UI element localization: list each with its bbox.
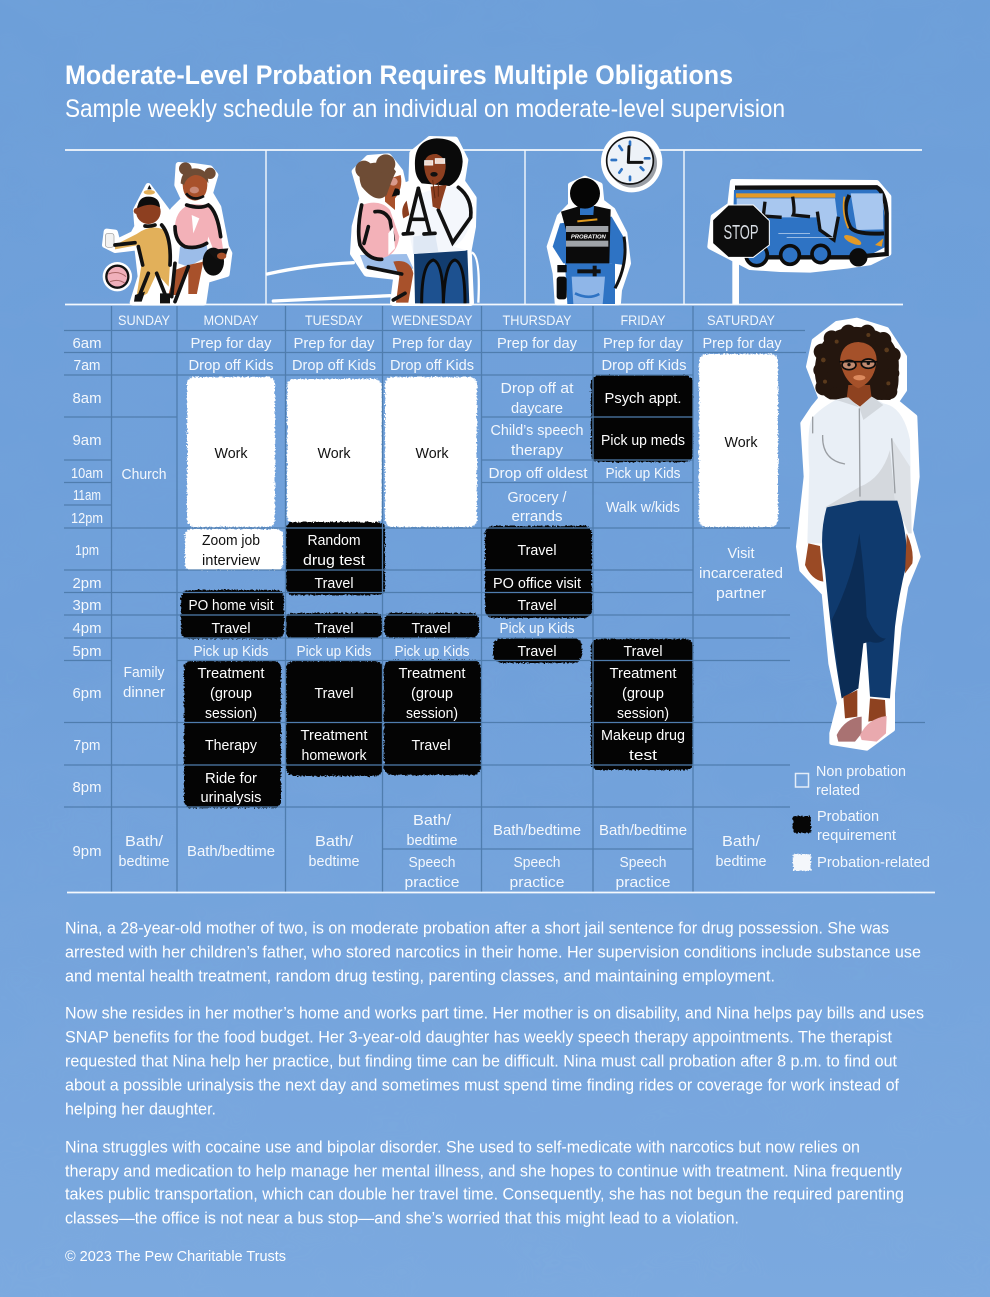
legend: non probation related bbox=[796, 764, 906, 799]
column: Tuesday: bedtime bbox=[308, 853, 360, 870]
column: Friday: Pick up Kids bbox=[606, 465, 680, 482]
column: Thursday: Grocery / bbox=[508, 489, 567, 506]
block: Saturday work bbox=[699, 354, 778, 527]
legend: non probation related: related bbox=[816, 783, 860, 799]
legend: non probation related: Non probation bbox=[816, 764, 906, 780]
illustration: bus and stop sign: STOP bbox=[723, 222, 758, 244]
day headers: SUNDAY bbox=[118, 312, 171, 328]
block: Friday evening obligations bbox=[591, 639, 693, 770]
text block: paragraph two: Now she resides in her mother’s home and works part time. Her mother is on disability, and Nina helps pay bills and uses bbox=[65, 1004, 924, 1022]
text block: paragraph two bbox=[65, 1004, 924, 1118]
day headers: SATURDAY bbox=[707, 312, 776, 328]
column: Saturday: partner bbox=[716, 585, 766, 602]
column: Monday: (group bbox=[210, 685, 252, 702]
block: Wednesday evening obligations bbox=[384, 660, 481, 775]
block: Thursday office visit and travel bbox=[485, 526, 592, 618]
column: Thursday: Bath/bedtime bbox=[493, 822, 581, 839]
column: Friday: session) bbox=[617, 705, 669, 722]
column: Wednesday: Drop off Kids bbox=[390, 357, 474, 374]
column: Wednesday: Treatment bbox=[398, 665, 466, 682]
block: Wednesday work bbox=[385, 377, 477, 527]
column: Wednesday: practice bbox=[404, 874, 460, 891]
time labels: 10am bbox=[71, 465, 103, 482]
column: Wednesday bbox=[390, 335, 474, 891]
column: Friday: Treatment bbox=[610, 665, 677, 682]
column: Sunday: dinner bbox=[123, 684, 165, 701]
column: Tuesday: Bath/ bbox=[315, 833, 354, 850]
column: Wednesday: session) bbox=[406, 705, 458, 722]
column: Tuesday: Pick up Kids bbox=[296, 643, 372, 660]
text block: paragraph two: requested that Nina help her practice, but finding time can be difficult. Nina must call probation after 8 p.m. to find out bbox=[65, 1052, 897, 1070]
day headers: FRIDAY bbox=[620, 312, 666, 328]
legend bbox=[793, 764, 930, 871]
column: Wednesday: Bath/ bbox=[413, 812, 452, 829]
column: Wednesday: bedtime bbox=[406, 832, 458, 849]
copyright: © 2023 The Pew Charitable Trusts bbox=[65, 1249, 286, 1265]
column: Thursday: therapy bbox=[511, 442, 564, 459]
column: Saturday bbox=[699, 335, 783, 870]
column: Saturday: Work bbox=[724, 434, 758, 451]
column: Friday: Bath/bedtime bbox=[599, 822, 687, 839]
column: Friday bbox=[599, 335, 687, 891]
column: Thursday: Drop off oldest bbox=[488, 465, 588, 482]
column: Tuesday: Treatment bbox=[300, 727, 368, 744]
column: Thursday: Travel bbox=[518, 597, 556, 614]
illustration: child with therapist bbox=[267, 138, 479, 303]
column: Monday: Bath/bedtime bbox=[187, 843, 275, 860]
legend: probation requirement: Probation bbox=[817, 809, 879, 825]
day headers: MONDAY bbox=[204, 312, 259, 328]
column: Monday: Drop off Kids bbox=[188, 357, 274, 374]
text block: paragraph three: Nina struggles with cocaine use and bipolar disorder. She used to self-medicate with narcotics but now relies on bbox=[65, 1138, 860, 1156]
time labels: 4pm bbox=[72, 620, 102, 637]
probation-related and requirement blocks bbox=[181, 354, 778, 808]
column: Wednesday: Speech bbox=[408, 854, 456, 871]
column: Wednesday: Prep for day bbox=[392, 335, 472, 352]
time labels: 9am bbox=[72, 432, 102, 449]
column: Friday: Speech bbox=[620, 854, 666, 871]
illustration: probation officer: PROBATION bbox=[571, 234, 607, 240]
illustration: Nina standing bbox=[798, 320, 918, 748]
day headers: THURSDAY bbox=[502, 312, 572, 328]
column: Thursday: daycare bbox=[511, 400, 563, 417]
column: Monday: Treatment bbox=[198, 665, 265, 682]
block: Thursday evening travel bbox=[493, 638, 582, 663]
column: Friday: Walk w/kids bbox=[606, 499, 680, 516]
illustration: children with ball bbox=[103, 162, 229, 303]
time labels: 12pm bbox=[71, 510, 103, 527]
block: Tuesday afternoon travel bbox=[286, 613, 382, 638]
time labels: 11am bbox=[73, 487, 101, 504]
text block: paragraph one: and mental health treatment, random drug testing, parenting classes, and maintaining employment. bbox=[65, 968, 775, 986]
text block: paragraph two: SNAP benefits for the food budget. Her 3-year-old daughter has weekly speech therapy appointments. The therapist bbox=[65, 1028, 892, 1046]
column: Wednesday: Pick up Kids bbox=[394, 643, 470, 660]
column: Friday: (group bbox=[622, 685, 664, 702]
time labels: 8pm bbox=[72, 779, 102, 796]
text block: paragraph three: therapy and medication to help manage her mental illness, and she hopes to continue with treatment. Nina frequently bbox=[65, 1162, 903, 1180]
column: Monday: PO home visit bbox=[188, 597, 274, 614]
column: Tuesday: Travel bbox=[314, 685, 354, 702]
block: Tuesday evening obligations bbox=[286, 661, 383, 776]
text block: paragraph three: takes public transportation, which can double her travel time. Consequently, she has not begun the required parenting bbox=[65, 1186, 904, 1204]
column: Monday: Travel bbox=[212, 620, 250, 637]
schedule table bbox=[64, 306, 925, 892]
text block: paragraph two: helping her daughter. bbox=[65, 1100, 216, 1118]
time labels: 9pm bbox=[72, 843, 102, 860]
time labels: 6am bbox=[72, 335, 102, 352]
text block: paragraph two: about a possible urinalysis the next day and sometimes must spend time finding rides or coverage for work instead of bbox=[65, 1076, 899, 1094]
legend: probation-related: Probation-related bbox=[817, 855, 930, 871]
day headers: TUESDAY bbox=[305, 312, 364, 328]
column: Monday: urinalysis bbox=[200, 789, 262, 806]
column: Thursday bbox=[488, 335, 588, 891]
illustration: probation officer bbox=[549, 178, 628, 304]
column: Sunday: Family bbox=[124, 664, 165, 681]
text block: paragraph one: arrested with her children’s father, who stored narcotics in their home. Her supervision conditions include substance use bbox=[65, 944, 921, 962]
column: Sunday: Bath/ bbox=[125, 833, 164, 850]
column: Monday: Work bbox=[214, 445, 248, 462]
column: Tuesday: Travel bbox=[314, 620, 354, 637]
column: Sunday: bedtime bbox=[118, 853, 170, 870]
column: Sunday bbox=[118, 466, 170, 870]
column: Tuesday: Drop off Kids bbox=[292, 357, 376, 374]
day headers: WEDNESDAY bbox=[392, 312, 473, 328]
column: Thursday: Pick up Kids bbox=[500, 620, 574, 637]
time labels bbox=[71, 335, 103, 860]
time labels: 7am bbox=[74, 357, 100, 374]
column: Monday: Pick up Kids bbox=[194, 643, 268, 660]
column: Thursday: practice bbox=[510, 874, 564, 891]
time labels: 8am bbox=[72, 390, 102, 407]
time labels: 3pm bbox=[72, 597, 102, 614]
column: Friday: Makeup drug bbox=[601, 727, 685, 744]
column: Thursday: Drop off at bbox=[500, 380, 574, 397]
block: Monday work bbox=[187, 377, 275, 527]
column: Friday: Psych appt. bbox=[604, 390, 682, 407]
column: Sunday: Church bbox=[122, 466, 166, 483]
text block: paragraph three: classes—the office is not near a bus stop—and she’s worried that this might lead to a violation. bbox=[65, 1210, 739, 1228]
column: Thursday: Travel bbox=[518, 643, 556, 660]
column: Saturday: Prep for day bbox=[702, 335, 782, 352]
column: Saturday: Visit bbox=[728, 545, 755, 562]
legend: probation requirement: requirement bbox=[817, 828, 896, 844]
column: Monday: Ride for bbox=[205, 770, 257, 787]
column: Thursday: Prep for day bbox=[497, 335, 577, 352]
column: Monday: Prep for day bbox=[190, 335, 272, 352]
column: Thursday: PO office visit bbox=[493, 575, 582, 592]
illustration: wall clock bbox=[601, 131, 662, 192]
column: Tuesday: Random bbox=[308, 532, 360, 549]
text block: paragraph three bbox=[65, 1138, 904, 1228]
column: Friday: Prep for day bbox=[603, 335, 683, 352]
column: Saturday: bedtime bbox=[716, 853, 766, 870]
column: Wednesday: (group bbox=[411, 685, 453, 702]
block: Friday psych appointment and meds bbox=[591, 375, 693, 462]
column: Tuesday: homework bbox=[302, 747, 367, 764]
time labels: 1pm bbox=[75, 542, 99, 559]
time labels: 6pm bbox=[72, 685, 102, 702]
column: Thursday: errands bbox=[512, 508, 562, 525]
column: Saturday: incarcerated bbox=[699, 565, 783, 582]
column: Thursday: Travel bbox=[518, 542, 556, 559]
time labels: 5pm bbox=[72, 643, 102, 660]
time labels: 7pm bbox=[74, 737, 100, 754]
block: Wednesday afternoon travel bbox=[384, 613, 479, 638]
column: Monday: Zoom job bbox=[202, 532, 260, 549]
column: Tuesday: Prep for day bbox=[294, 335, 375, 352]
block: Monday zoom interview bbox=[185, 529, 283, 570]
column: Friday: test bbox=[629, 747, 658, 764]
subtitle: Sample weekly schedule for an individual on moderate-level supervision bbox=[65, 95, 785, 123]
text block: paragraph one bbox=[65, 920, 921, 986]
column: Tuesday: drug test bbox=[303, 552, 366, 569]
block: Monday home visit and travel bbox=[181, 590, 284, 639]
column: Wednesday: Travel bbox=[412, 620, 450, 637]
column: Friday: Pick up meds bbox=[601, 432, 685, 449]
column: Friday: Drop off Kids bbox=[602, 357, 686, 374]
title: Moderate-Level Probation Requires Multiple Obligations bbox=[65, 60, 733, 90]
column: Monday: Therapy bbox=[205, 737, 257, 754]
time labels: 2pm bbox=[72, 575, 102, 592]
column: Monday bbox=[187, 335, 275, 860]
column: Friday: practice bbox=[616, 874, 670, 891]
column: Wednesday: Work bbox=[416, 445, 449, 462]
block: Monday evening obligations bbox=[184, 661, 281, 808]
column: Monday: session) bbox=[205, 705, 257, 722]
text block: paragraph one: Nina, a 28-year-old mother of two, is on moderate probation after a short jail sentence for drug possession. She was bbox=[65, 920, 889, 938]
column: Saturday: Bath/ bbox=[722, 833, 761, 850]
column: Tuesday: Travel bbox=[314, 575, 354, 592]
column: Monday: interview bbox=[202, 552, 260, 569]
legend: probation requirement bbox=[793, 809, 896, 844]
column: Thursday: Speech bbox=[514, 854, 560, 871]
block: Tuesday drug test and travel bbox=[286, 522, 385, 595]
illustration: bus and stop sign bbox=[710, 182, 889, 304]
column: Tuesday: Work bbox=[318, 445, 351, 462]
column: Wednesday: Travel bbox=[412, 737, 450, 754]
column: Thursday: Child’s speech bbox=[490, 422, 584, 439]
block: Tuesday work bbox=[287, 379, 382, 523]
day headers bbox=[118, 312, 776, 328]
column: Friday: Travel bbox=[624, 643, 662, 660]
column: Tuesday bbox=[292, 335, 376, 870]
